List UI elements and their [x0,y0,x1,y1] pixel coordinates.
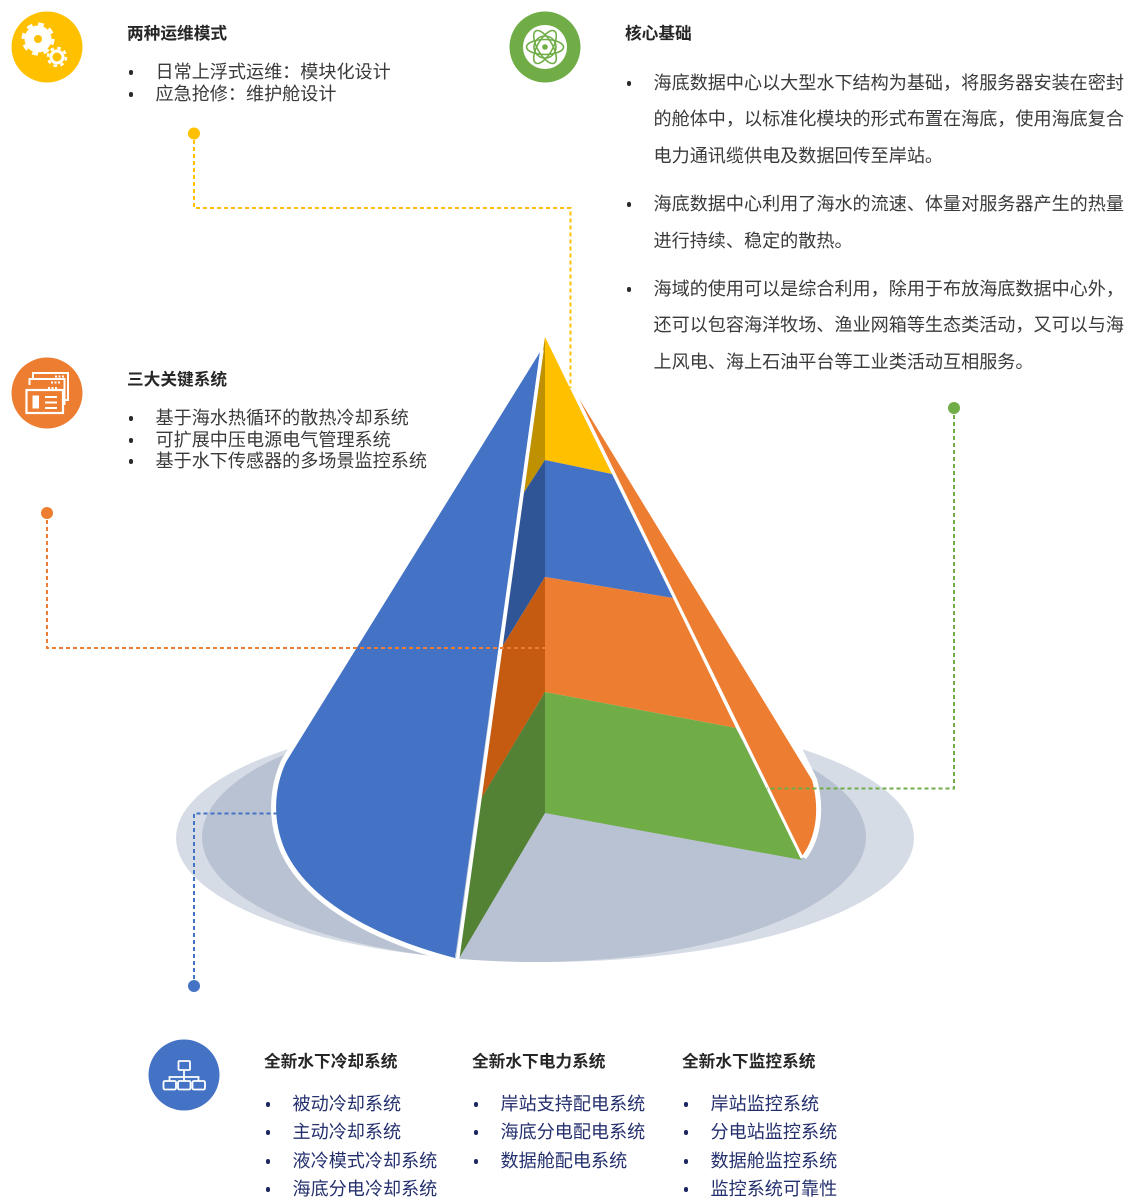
heading: 全新水下监控系统 [682,1052,816,1071]
connector: yellow [188,128,570,388]
bullet items: 数据舱监控系统 [710,1151,837,1171]
icon: hierarchy [148,1040,220,1110]
connector: green [767,402,960,788]
heading: 三大关键系统 [127,370,227,389]
bullet items: 岸站支持配电系统 [500,1094,645,1114]
blue wedge left [276,352,540,958]
bullet items: 数据舱配电系统 [500,1151,627,1171]
paragraph: sea use: 上风电、海上石油平台等工业类活动互相服务。 [654,352,1033,372]
icon: gears [12,12,82,82]
heading: 核心基础 [625,24,692,43]
bullet items: 监控系统可靠性 [710,1179,837,1199]
bullet items: 基于海水热循环的散热冷却系统 [156,408,409,428]
paragraph: cooling: 进行持续、稳定的散热。 [654,231,853,251]
white gap right of blue wedge [458,350,542,960]
text block: two O&M modes [127,24,391,104]
text block: three key systems [127,370,427,471]
paragraph: cooling: 海底数据中心利用了海水的流速、体量对服务器产生的热量 [654,194,1124,214]
bullet items: 被动冷却系统 [292,1094,401,1114]
paragraph: structure [627,73,1124,166]
paragraph: structure: 的舱体中，以标准化模块的形式布置在海底，使用海底复合 [654,109,1124,129]
bullet items: 日常上浮式运维：模块化设计 [156,62,391,82]
column: underwater power system [472,1052,645,1171]
bullet items: 主动冷却系统 [292,1122,401,1142]
pyramid centre stack [458,337,802,960]
connector: orange [41,507,545,648]
column: underwater monitoring system [682,1052,837,1199]
bullet items: 分电站监控系统 [710,1122,837,1142]
text block: core foundation [625,24,1124,372]
base ellipses [176,712,914,962]
connector: blue [188,814,277,992]
bullet items [266,1094,437,1199]
white halo around wedges [276,725,816,958]
heading: 全新水下冷却系统 [264,1052,398,1071]
bullet items: 应急抢修：维护舱设计 [156,84,336,104]
bullet items: 海底分电冷却系统 [292,1179,437,1199]
paragraph: structure: 电力通讯缆供电及数据回传至岸站。 [654,146,943,166]
paragraph: sea use: 还可以包容海洋牧场、渔业网箱等生态类活动，又可以与海 [654,315,1124,335]
green layer [458,692,802,960]
bullet items [129,62,391,104]
white gap left of orange wedge [577,398,802,858]
paragraph: sea use: 海域的使用可以是综合利用，除用于布放海底数据中心外， [654,279,1124,299]
heading: 全新水下电力系统 [472,1052,606,1071]
bullet items: 液冷模式冷却系统 [292,1151,437,1171]
orange wedge right [578,397,816,856]
bullet items: 可扩展中压电源电气管理系统 [156,430,391,450]
bullet items: 岸站监控系统 [710,1094,819,1114]
bullet items [129,408,427,471]
paragraph: sea use [627,279,1124,372]
paragraph: structure: 海底数据中心以大型水下结构为基础，将服务器安装在密封 [654,73,1124,93]
icon: documents [12,358,82,428]
bullet items: 基于水下传感器的多场景监控系统 [156,451,427,471]
icon: atom [510,12,580,82]
yellow layer [523,337,612,494]
blue layer [502,460,673,647]
orange layer [481,577,736,799]
bullet items [684,1094,837,1199]
paragraph: cooling [627,194,1124,251]
column: underwater cooling system [264,1052,437,1199]
bullet items: 海底分电配电系统 [500,1122,645,1142]
bullet items [474,1094,645,1171]
heading: 两种运维模式 [127,24,227,43]
